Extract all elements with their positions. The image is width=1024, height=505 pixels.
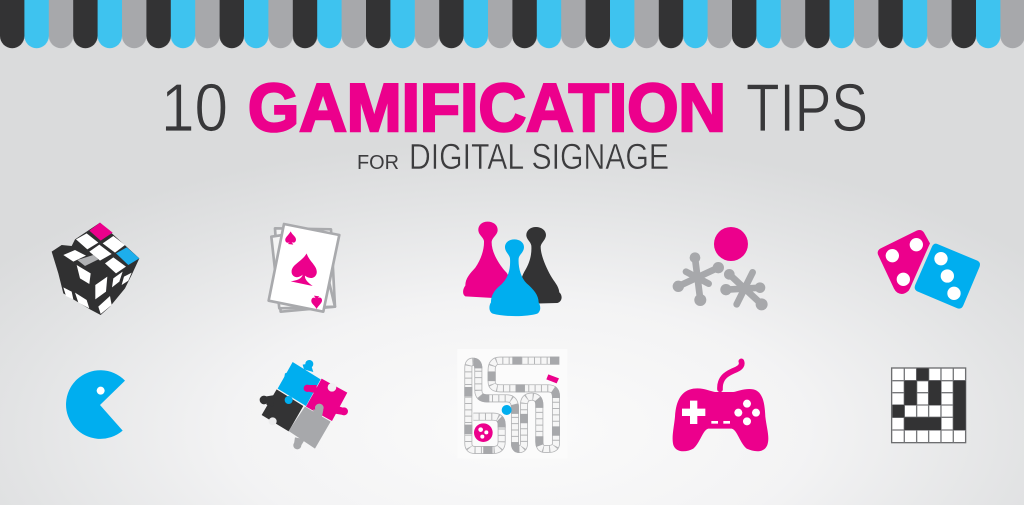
pink pawn	[463, 222, 510, 298]
icon: jigsaw puzzle	[260, 360, 348, 449]
title: GAMIFICATION	[248, 70, 726, 146]
icon: board game	[457, 349, 567, 458]
icon: crossword grid	[892, 368, 966, 443]
icon: game controller	[673, 361, 768, 451]
title	[161, 70, 868, 146]
icon: dice	[878, 230, 980, 309]
gray piece	[289, 404, 331, 449]
title: TIPS	[746, 70, 868, 146]
subtitle: DIGITAL SIGNAGE	[409, 136, 669, 177]
scalloped top awning	[0, 0, 1024, 49]
icon: rubik's cube	[52, 223, 139, 315]
blue pawn	[489, 239, 540, 316]
blue piece	[278, 360, 321, 406]
pink piece	[304, 379, 348, 421]
icon: game pawns	[463, 222, 562, 316]
icon: playing cards	[269, 224, 339, 312]
icon: pac-man	[66, 370, 125, 439]
dark pawn	[520, 227, 562, 304]
title: 10	[161, 70, 228, 146]
subtitle: FOR	[357, 152, 399, 174]
icon: jacks and ball	[673, 227, 768, 310]
dark piece	[260, 389, 304, 431]
